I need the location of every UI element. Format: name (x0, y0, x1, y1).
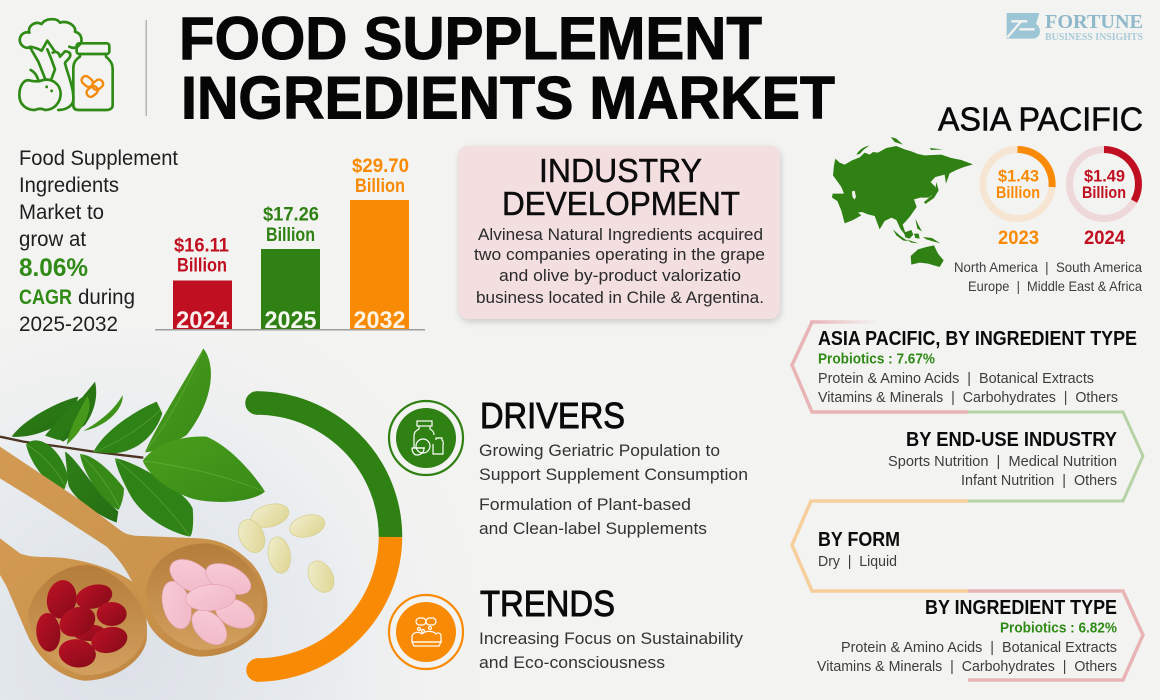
donut chart: 2024: $1.49 (1084, 166, 1125, 186)
panel: by end-use industry: BY END-USE INDUSTRY (906, 429, 1118, 451)
text block: CAGR statement: Market to (19, 201, 104, 224)
panel: by form (792, 501, 968, 591)
text block: other regions (954, 259, 1142, 294)
donut chart: 2023: $1.43 (998, 166, 1039, 186)
heading: trends: TRENDS (480, 583, 615, 624)
logo: Fortune Business Insights (1007, 11, 1143, 43)
bar 2024 (173, 234, 232, 334)
panel: by form: Dry | Liquid (818, 554, 897, 570)
spoon: upper with pink tablets (0, 447, 267, 657)
panel: Asia Pacific by ingredient type: Vitamins & Minerals | Carbohydrates | Others (818, 390, 1118, 406)
donut chart: 2024: 2024 (1084, 228, 1125, 249)
text block: other regions: Europe | Middle East & Africa (968, 278, 1142, 294)
panel: by form: BY FORM (818, 529, 900, 551)
header divider (146, 20, 147, 116)
bar 2025: 2025 (264, 307, 316, 334)
title: INGREDIENTS MARKET (181, 64, 835, 132)
heading: Asia Pacific: ASIA PACIFIC (938, 100, 1143, 138)
heading: drivers: DRIVERS (480, 395, 625, 436)
arc: green drivers half (245, 391, 390, 537)
panel: by end-use industry: Sports Nutrition | Medical Nutrition (888, 454, 1117, 470)
donut chart: 2024: Billion (1082, 183, 1126, 202)
bar chart: market size (155, 155, 425, 334)
title: FOOD SUPPLEMENT (179, 5, 762, 72)
panel: Asia Pacific by ingredient type (792, 322, 1137, 412)
icon: trends salad bowl (389, 595, 463, 669)
panel: Asia Pacific by ingredient type: Protein & Amino Acids | Botanical Extracts (818, 371, 1094, 387)
panel: by ingredient type: BY INGREDIENT TYPE (925, 597, 1117, 619)
text block: drivers (479, 441, 748, 538)
donut chart: 2023 (983, 149, 1052, 249)
map: Asia Pacific (832, 137, 973, 267)
bar 2024: $16.11 (174, 234, 229, 256)
panel: industry development: two companies operating in the grape (474, 245, 765, 264)
bar 2032: Billion (355, 175, 405, 197)
leaves (0, 348, 265, 537)
text block: CAGR statement: 2025-2032 (19, 313, 118, 336)
photo backdrop (0, 330, 510, 700)
donut chart: 2023: 2023 (998, 228, 1039, 249)
bar 2024: 2024 (176, 307, 230, 334)
photo: leaves, wooden spoons and pills (0, 348, 339, 681)
bar 2025: Billion (266, 224, 315, 246)
panel: industry development: INDUSTRY (539, 152, 702, 189)
text block: drivers: Growing Geriatric Population to (479, 441, 720, 460)
panel: by end-use industry: Infant Nutrition | Others (961, 473, 1117, 489)
panel: by end-use industry (888, 412, 1143, 501)
text block: CAGR statement: grow at (19, 228, 86, 251)
text block: other regions: North America | South America (954, 259, 1142, 275)
panel: by ingredient type: Vitamins & Minerals | Carbohydrates | Others (817, 659, 1117, 675)
title (179, 5, 835, 132)
text block: CAGR statement: 8.06% (19, 254, 88, 282)
icon: drivers bottle (389, 401, 463, 475)
text block: CAGR statement: Food Supplement (19, 147, 178, 170)
panel: by ingredient type: Probiotics : 6.82% (1000, 620, 1117, 636)
panel: industry development: business located in Chile & Argentina. (476, 288, 764, 307)
panel: industry development: and olive by-product valorizatio (499, 266, 741, 285)
text block: CAGR statement: CAGR (19, 286, 72, 309)
panel: industry development: Alvinesa Natural Ingredients acquired (478, 225, 763, 244)
spoon: lower with red capsules (0, 538, 147, 681)
text block: CAGR statement: Ingredients (19, 174, 119, 197)
donut chart: 2023: Billion (996, 183, 1040, 202)
icon: vegetables and supplement bottle (19, 19, 113, 110)
bar 2024: Billion (177, 254, 227, 276)
bar 2032: $29.70 (352, 155, 409, 177)
logo: Fortune Business Insights: BUSINESS INSIGHTS (1045, 31, 1143, 43)
bar 2025 (261, 204, 320, 334)
panel: industry development (458, 146, 780, 321)
text block: drivers: Support Supplement Consumption (479, 465, 748, 484)
logo: Fortune Business Insights: FORTUNE (1045, 11, 1143, 33)
arc: orange trends half (246, 537, 390, 682)
donut chart: 2024 (1070, 150, 1138, 249)
text block: trends: and Eco-consciousness (479, 653, 665, 672)
bar 2032: 2032 (354, 307, 406, 334)
bar 2032 (350, 155, 409, 334)
text block: trends: Increasing Focus on Sustainability (479, 629, 743, 648)
text block: CAGR statement: during (78, 286, 135, 309)
text block: drivers: and Clean-label Supplements (479, 519, 707, 538)
yellow softgels (233, 500, 339, 597)
panel: industry development: DEVELOPMENT (502, 185, 740, 222)
panel: Asia Pacific by ingredient type: Probiotics : 7.67% (818, 352, 935, 368)
panel: by ingredient type (817, 591, 1143, 680)
text block: CAGR statement (19, 147, 178, 336)
panel: by ingredient type: Protein & Amino Acids | Botanical Extracts (841, 640, 1117, 656)
text block: trends (479, 629, 743, 672)
text block: drivers: Formulation of Plant-based (479, 495, 691, 514)
bar 2025: $17.26 (263, 204, 319, 226)
